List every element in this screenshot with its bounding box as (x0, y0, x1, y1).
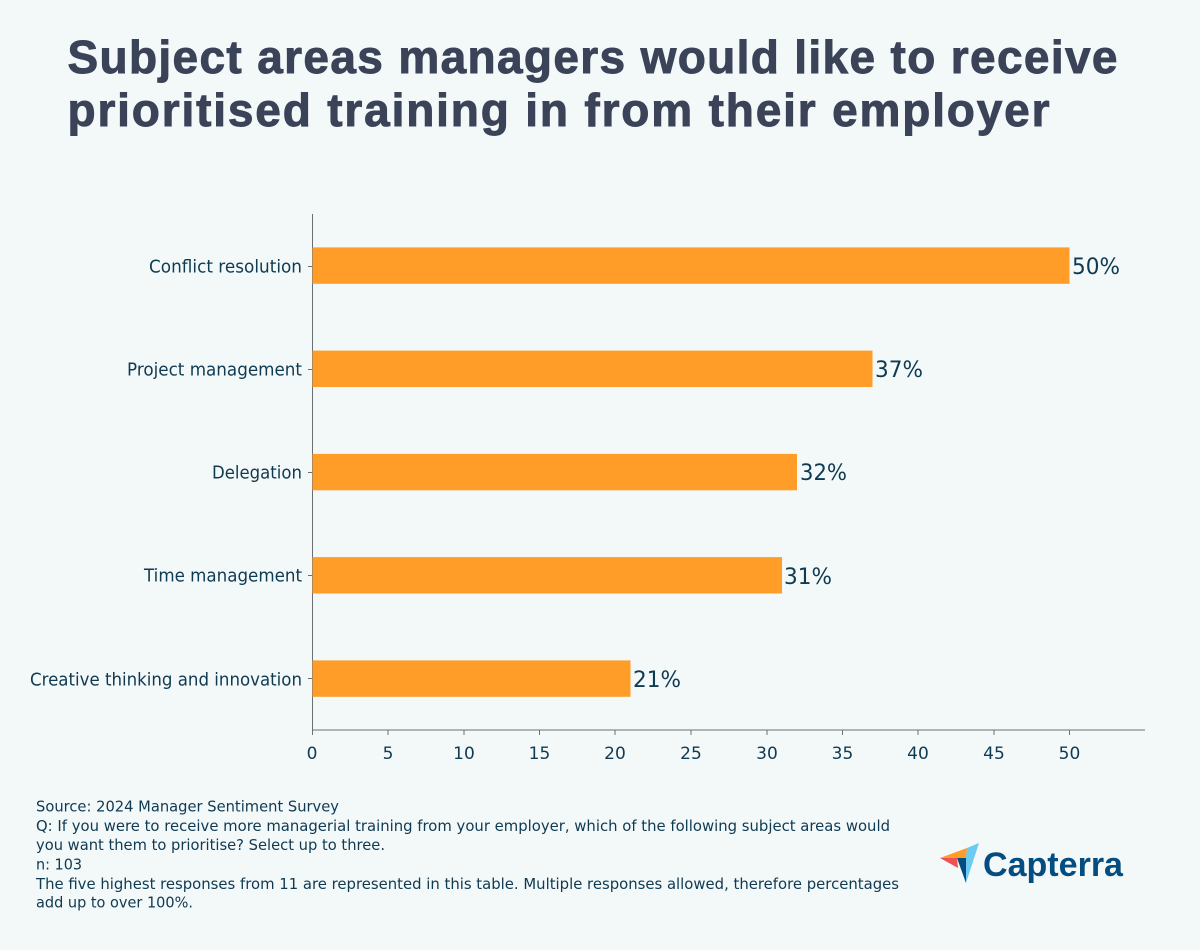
axis tick labels: 20 (604, 744, 626, 764)
axis tick labels: 15 (529, 744, 550, 764)
title: prioritised training in from their employer (68, 84, 1050, 136)
value labels (633, 254, 1120, 693)
category labels (30, 258, 302, 690)
source notes (35, 798, 899, 912)
source notes: Source: 2024 Manager Sentiment Survey (36, 798, 339, 816)
axis tick labels: 10 (453, 744, 475, 764)
value labels: 50% (1072, 254, 1120, 280)
source notes: n: 103 (36, 856, 82, 874)
value labels: 21% (633, 667, 681, 693)
source notes: The five highest responses from 11 are represented in this table. Multiple responses allowed, therefore percentages (35, 875, 899, 893)
value labels: 37% (875, 357, 923, 383)
category labels: Conflict resolution (149, 258, 302, 278)
category labels: Project management (127, 360, 302, 380)
icon: logo arrow (940, 843, 979, 883)
axis tick labels: 50 (1059, 744, 1080, 764)
axis tick labels (307, 744, 1080, 764)
category labels: Creative thinking and innovation (30, 670, 302, 690)
axis tick labels: 45 (983, 744, 1005, 764)
category labels: Delegation (212, 464, 302, 484)
bar chart (30, 214, 1145, 764)
axis tick labels: 30 (756, 744, 778, 764)
source notes: add up to over 100%. (36, 894, 193, 912)
logo: Capterra (940, 843, 1124, 884)
axes (308, 214, 1145, 735)
axis tick labels: 5 (383, 744, 393, 764)
axis tick labels: 25 (680, 744, 702, 764)
value labels: 32% (800, 460, 847, 486)
title (68, 31, 1118, 136)
value labels: 31% (784, 564, 832, 590)
axis tick labels: 35 (832, 744, 853, 764)
logo wordmark: Capterra (983, 846, 1124, 884)
source notes: you want them to prioritise? Select up to three. (36, 836, 385, 854)
category labels: Time management (143, 566, 302, 586)
axis tick labels: 0 (307, 744, 317, 764)
source notes: Q: If you were to receive more managerial training from your employer, which of the following subject areas would (36, 817, 890, 835)
title: Subject areas managers would like to receive (68, 31, 1118, 83)
bars (312, 247, 1070, 697)
axis tick labels: 40 (907, 744, 929, 764)
